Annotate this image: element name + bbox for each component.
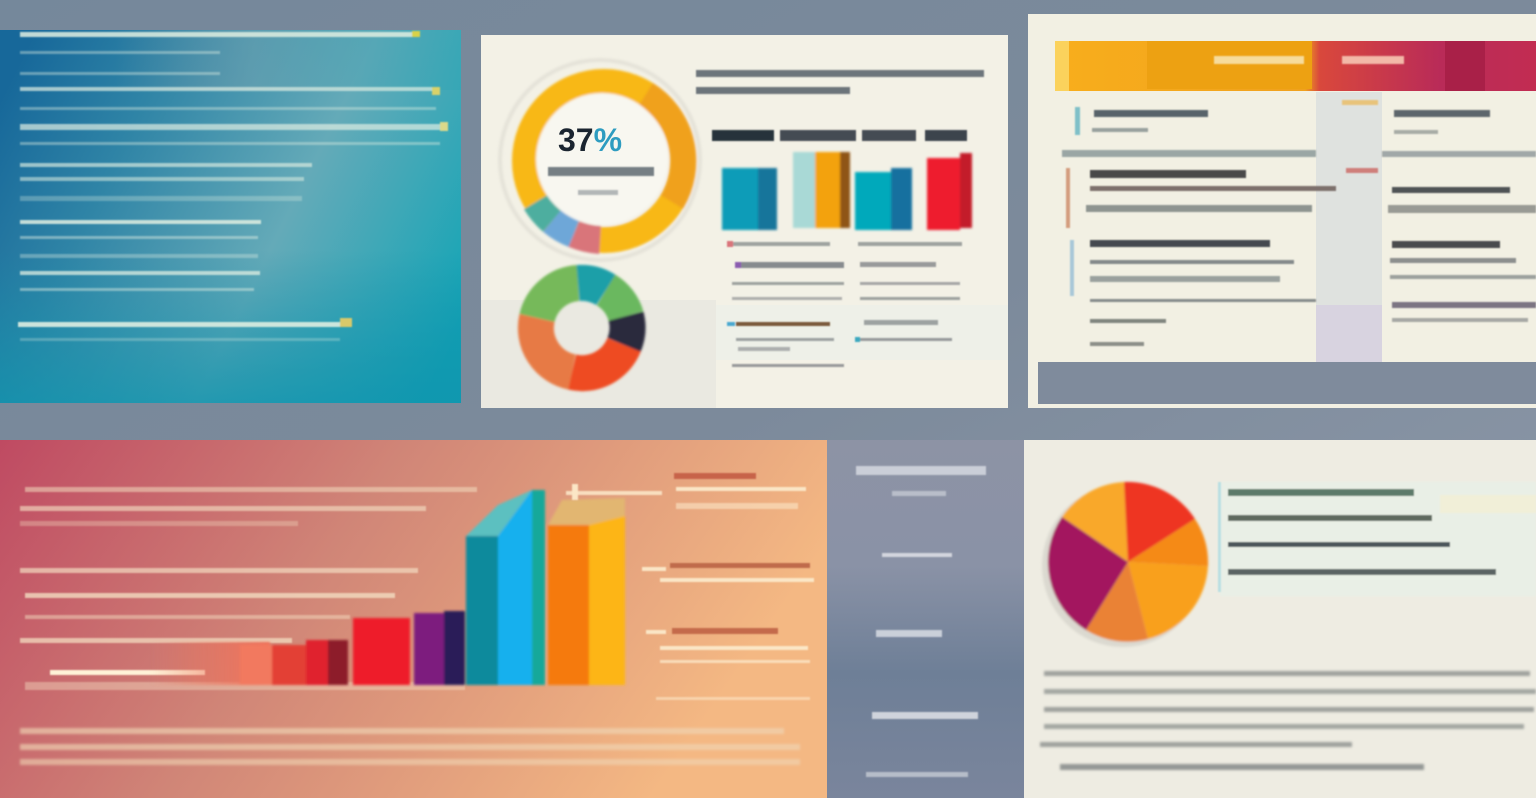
donut chart: large yellow ring	[500, 60, 700, 260]
panel: teal text panel	[0, 30, 461, 403]
table rows: right column	[1342, 100, 1536, 322]
panel: right report	[1028, 14, 1536, 408]
paragraph: warm panel	[20, 728, 800, 765]
paragraph: pie report	[1040, 671, 1536, 770]
text lines: warm panel	[20, 487, 477, 690]
pie chart	[1042, 482, 1208, 647]
panel: warm bar chart panel	[0, 440, 827, 798]
donut chart: small multicolour	[536, 283, 628, 373]
header band	[1055, 41, 1536, 91]
bar chart: four bars	[722, 152, 972, 230]
bar chart title	[712, 130, 967, 141]
donut centre value: 37%	[558, 122, 622, 158]
slate labels	[856, 466, 986, 777]
panel: pie report	[1024, 440, 1536, 798]
callout box: pie legend	[1218, 482, 1536, 596]
panel: centre dashboard	[481, 35, 1008, 408]
panel: slate labels column	[827, 440, 1024, 798]
table rows: left column	[1062, 107, 1336, 346]
callouts: right of chart	[566, 473, 814, 700]
text lines: teal panel	[18, 31, 448, 341]
heading: centre panel	[696, 70, 984, 94]
donut centre caption	[548, 167, 654, 195]
bar chart: ascending bars	[150, 490, 625, 685]
legend lines	[727, 241, 962, 367]
header labels	[1214, 56, 1404, 64]
